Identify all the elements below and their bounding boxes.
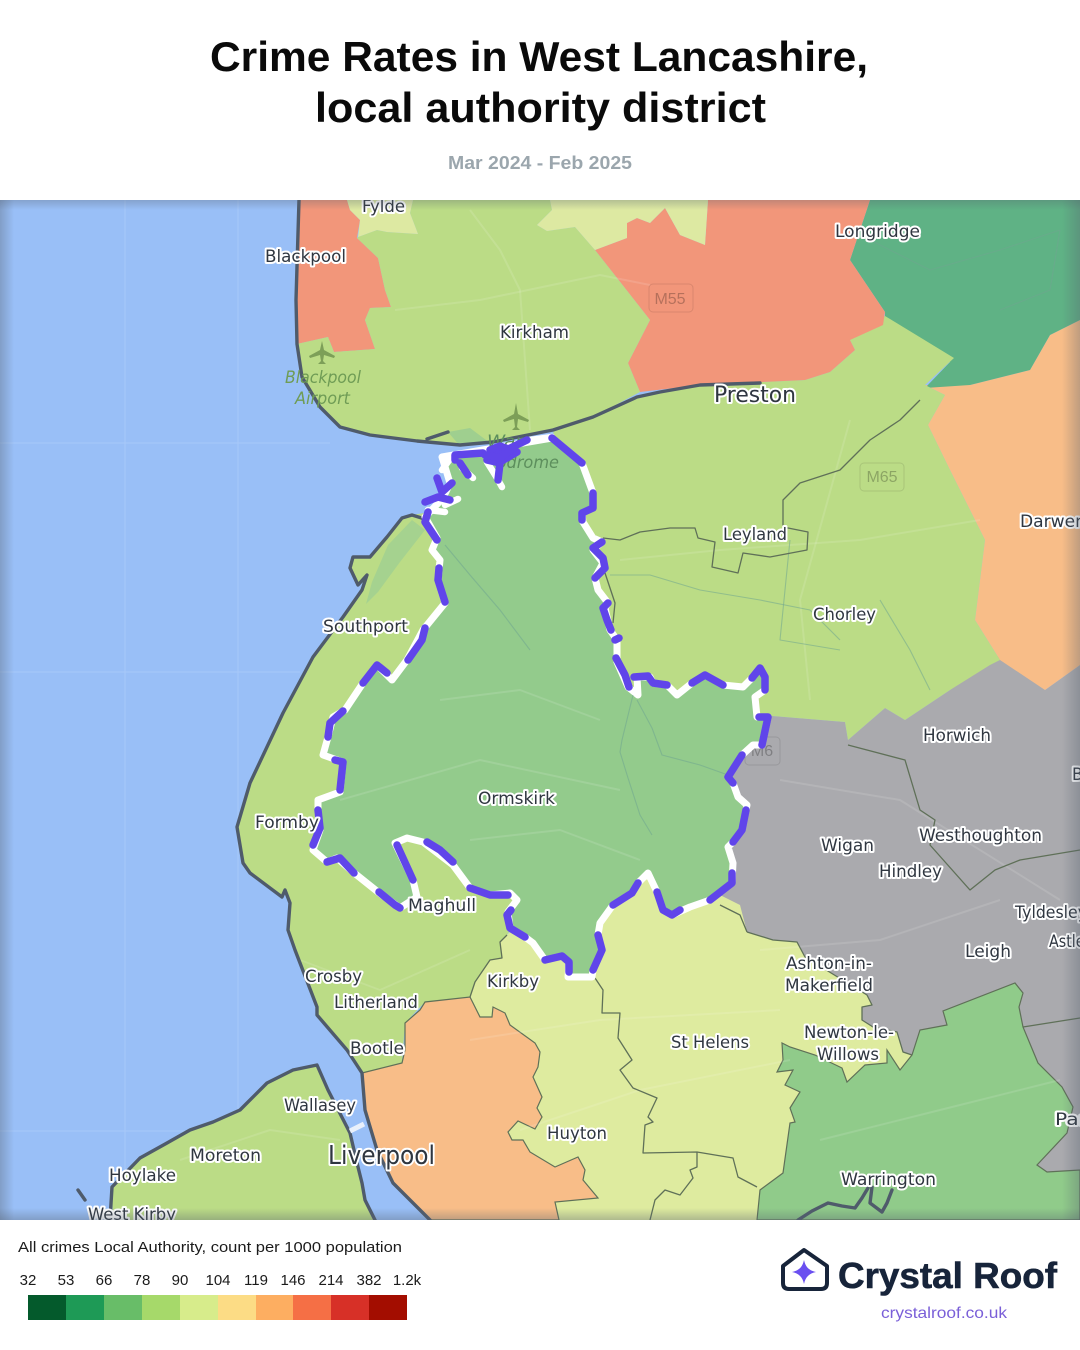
legend value labels: 104 (205, 1272, 231, 1289)
legend value labels: 382 (356, 1272, 382, 1289)
place labels: St Helens (671, 1033, 749, 1053)
West Lancashire fill with white outline (313, 438, 768, 977)
legend (18, 1239, 422, 1320)
place labels: Crosby (305, 967, 362, 987)
coastline (78, 200, 892, 1220)
place labels: Westhoughton (919, 826, 1042, 846)
legend value labels: 66 (96, 1272, 112, 1289)
place labels: Bootle (350, 1039, 404, 1059)
icon: Blackpool airport plane (309, 341, 335, 364)
region: Sefton salt marsh (366, 520, 425, 604)
Warton Aerodrome label: rodrome (490, 453, 559, 473)
region: Blackpool (296, 200, 391, 352)
motorway shields: M6 (751, 743, 773, 760)
place labels: West Kirby (88, 1205, 176, 1225)
region: Ribble Valley (850, 200, 1080, 388)
legend value labels: 146 (280, 1272, 306, 1289)
icon: Warton aerodrome plane (503, 403, 529, 430)
wordmark: Crystal Roof (838, 1255, 1058, 1296)
title: local authority district (315, 84, 766, 131)
place labels: Preston (714, 383, 796, 408)
region: Wigan and Bolton, no data (722, 656, 1080, 1172)
Warton Aerodrome label: War (487, 432, 524, 452)
label: Blackpool Airport (285, 368, 361, 409)
place labels: Wigan (821, 836, 874, 856)
place labels: Ormskirk (478, 789, 555, 809)
legend value labels: 1.2k (393, 1272, 422, 1289)
place labels: Maghull (408, 896, 476, 916)
website link: crystalroof.co.uk (881, 1305, 1008, 1322)
legend value labels: 78 (134, 1272, 150, 1289)
roads and rivers (180, 210, 1060, 1160)
West Lancashire district (313, 432, 768, 977)
Warton Aerodrome label (488, 434, 558, 468)
place labels: Southport (323, 617, 408, 637)
region: Liverpool (362, 997, 598, 1220)
subtitle: date range: Mar 2024 - Feb 2025 (448, 153, 632, 173)
region: Sefton (237, 512, 530, 1073)
place labels: Newton-le- (804, 1023, 894, 1043)
title: Crime Rates in West Lancashire, (210, 33, 868, 80)
region: Blackburn (925, 320, 1080, 690)
place labels: Litherland (334, 993, 418, 1013)
map edge vignette (0, 200, 1080, 1220)
legend value labels: 32 (20, 1272, 36, 1289)
title (210, 33, 868, 131)
place labels: Liverpool (328, 1141, 435, 1171)
region: Wirral (112, 1065, 375, 1220)
place labels: Huyton (547, 1124, 607, 1144)
place labels: Warrington (841, 1170, 936, 1190)
motorway shields: M55 (654, 291, 686, 308)
place labels: Kirkham (500, 323, 569, 343)
legend value labels: 214 (318, 1272, 344, 1289)
region: Wyre and Ribble east (537, 200, 708, 250)
district boundaries (470, 400, 1080, 1220)
choropleth map (0, 197, 1080, 1225)
place labels: Willows (817, 1045, 879, 1065)
region: Fylde (297, 200, 650, 445)
legend value labels (20, 1272, 422, 1289)
place labels: Hoylake (109, 1166, 176, 1186)
place labels: Leigh (965, 942, 1011, 962)
white coastal tendrils (428, 437, 552, 512)
legend colour scale (28, 1295, 407, 1320)
motorway shields: M65 (866, 469, 898, 486)
place labels: Horwich (923, 726, 991, 746)
place labels: Kirkby (487, 972, 539, 992)
legend value labels: 53 (58, 1272, 74, 1289)
rivers inside West Lancashire (340, 545, 728, 860)
purple dashed boundary (313, 438, 768, 972)
motorway shields: M58 (657, 860, 689, 877)
region: South Ribble and Chorley (553, 316, 1000, 740)
logo: Crystal Roof (783, 1250, 1058, 1322)
place labels: Longridge (835, 222, 920, 242)
place labels: Moreton (190, 1146, 261, 1166)
region: Preston (595, 200, 885, 392)
place labels: Leyland (723, 525, 787, 545)
place labels: Blackpool (265, 247, 346, 267)
place labels: Fylde (362, 197, 405, 217)
region: Knowsley and St Helens (470, 860, 912, 1220)
legend value labels: 119 (244, 1272, 268, 1289)
sea (0, 200, 1080, 1220)
icon: house with star (783, 1250, 827, 1289)
label: Blackpool Airport: Airport (294, 389, 351, 409)
place labels: Hindley (879, 862, 942, 882)
place labels: Formby (255, 813, 319, 833)
region: Wyre south (347, 200, 418, 237)
place labels: Chorley (813, 605, 876, 625)
river mouth marsh (449, 428, 487, 444)
place labels: Wallasey (284, 1096, 356, 1116)
label: Blackpool Airport: Blackpool (285, 368, 361, 388)
legend value labels: 90 (172, 1272, 188, 1289)
place labels (88, 197, 1080, 1225)
place labels: Makerfield (785, 976, 873, 996)
Mersey crossing (350, 1124, 364, 1131)
legend title: All crimes Local Authority, count per 1000 population (18, 1239, 402, 1256)
motorway shields (648, 284, 904, 766)
region: Warrington (757, 983, 1080, 1220)
place labels: Ashton-in- (786, 954, 872, 974)
